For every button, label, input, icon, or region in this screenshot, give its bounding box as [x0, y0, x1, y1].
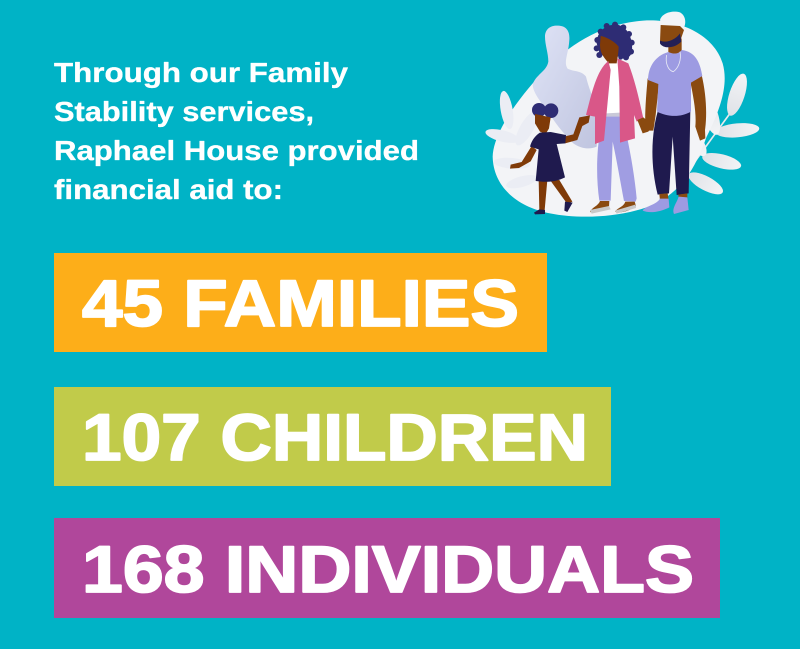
intro text — [54, 57, 419, 205]
girl: face — [535, 114, 551, 134]
stat bar: 107 children — [54, 387, 611, 486]
stat bar: 45 families — [54, 253, 547, 352]
intro text: Through our Family — [54, 57, 349, 88]
woman: top — [605, 63, 620, 115]
woman: face and neck — [600, 36, 619, 70]
woman: jeans — [597, 113, 637, 202]
girl: legs — [539, 180, 547, 210]
illustration: family — [484, 12, 760, 217]
stat bar: 107 children: 107 CHILDREN — [82, 400, 588, 474]
man: ankles — [659, 193, 687, 201]
leaves left — [484, 90, 542, 191]
woman: hair — [594, 22, 635, 60]
woman — [586, 22, 653, 214]
stat bar: 168 individuals: 168 INDIVIDUALS — [82, 532, 694, 606]
man: shoes — [643, 199, 669, 212]
man: shirt — [648, 50, 702, 116]
intro text: Raphael House provided — [54, 135, 419, 166]
stat bar: 168 individuals — [54, 518, 720, 618]
man: cap — [660, 12, 685, 28]
man — [643, 12, 706, 214]
woman: cardigan — [586, 61, 611, 144]
man: trousers — [652, 112, 690, 195]
girl: shoes — [534, 202, 573, 214]
man: neck — [668, 38, 682, 56]
blob — [493, 20, 725, 217]
girl: dress — [530, 132, 566, 182]
intro text: financial aid to: — [54, 174, 283, 205]
girl — [510, 103, 590, 214]
man: face and beard — [660, 25, 684, 47]
girl: hair — [532, 103, 558, 118]
man: arms — [645, 78, 659, 131]
woman: feet — [590, 201, 636, 212]
stat bar: 45 families: 45 FAMILIES — [82, 266, 519, 340]
leaves right — [683, 71, 760, 199]
girl: arms — [564, 115, 590, 143]
intro text: Stability services, — [54, 96, 314, 127]
silhouette — [533, 26, 598, 148]
woman: hand — [637, 117, 653, 133]
